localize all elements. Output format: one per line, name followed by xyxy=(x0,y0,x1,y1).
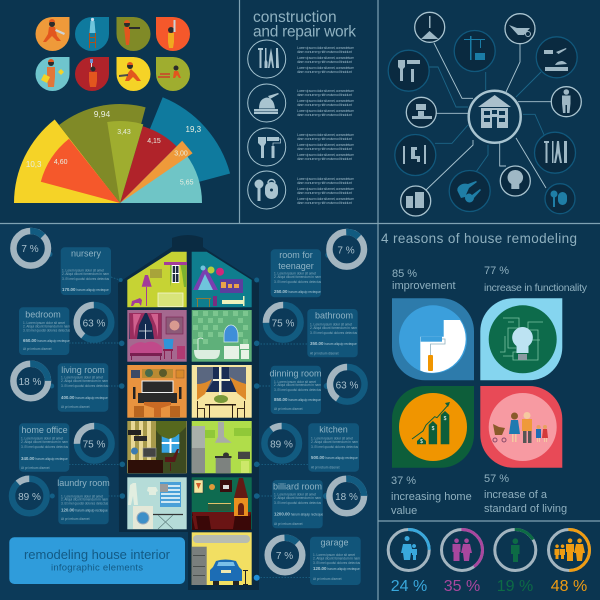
card: living room xyxy=(13,363,109,412)
heading: 4 reasons of house remodeling: 4 reasons of house remodeling xyxy=(381,231,577,246)
text: lorem lines 1: Lorem ipsum dolor sit amet, consectetuer xyxy=(297,65,355,70)
card: billiard room: At pri rebum disenet xyxy=(274,522,303,526)
banner: remodeling house interior: infographic elements xyxy=(51,562,143,574)
card: bathroom: bathroom xyxy=(315,310,353,320)
card: garage xyxy=(268,537,361,585)
stat: 48 percent: 48 % xyxy=(551,578,587,595)
panel: increasing home value: 37 % xyxy=(391,475,416,487)
card: dinning room xyxy=(269,360,371,414)
icon: trowel and bricks circle xyxy=(248,84,286,122)
card: kitchen: 1. Lorem ipsum dolor sit amet xyxy=(311,436,353,440)
icon: wheelbarrow xyxy=(505,14,535,44)
card: laundry room xyxy=(5,472,110,524)
card: laundry room: 89 % xyxy=(18,492,41,503)
icon: calculator and notes xyxy=(401,186,431,216)
stat: 48 percent xyxy=(548,530,590,595)
card: room for teenager xyxy=(271,232,364,297)
card: bedroom xyxy=(19,298,118,355)
banner: remodeling house interior: remodeling house interior xyxy=(24,547,171,562)
text: lorem lines 1: Lorem ipsum dolor sit amet, consectetuer xyxy=(297,45,355,50)
card: dinning room: dinning room xyxy=(269,368,322,378)
icon: wrenches and faucet xyxy=(395,134,436,176)
text: lorem lines 4: diam nonummy nibh euismod tincidunt xyxy=(297,180,353,185)
panel: standard of living: 57 % xyxy=(484,473,509,485)
icon: drill and key xyxy=(449,170,490,212)
icon: hook with load xyxy=(415,12,445,42)
text: lorem lines 2: Lorem ipsum dolor sit amet, consectetuer xyxy=(297,108,355,113)
stat: 35 percent: 35 % xyxy=(444,578,480,595)
card: garage: garage xyxy=(320,538,349,548)
card: living room: living room xyxy=(61,365,105,375)
card: kitchen: 2. Aliqui dicunt fomendum in nam xyxy=(311,440,358,444)
text: lorem lines 3: diam nonummy nibh euismod tincidunt xyxy=(297,146,353,151)
panel: increasing home value: $ xyxy=(444,416,447,422)
text: lorem lines 2: diam nonummy nibh euismod tincidunt xyxy=(297,102,353,107)
card: living room: 18 % xyxy=(19,377,42,388)
card: nursery xyxy=(13,231,111,295)
card: dinning room: 3. Et mel quodsi dolores detectus xyxy=(274,388,322,392)
card: room for teenager: room for xyxy=(279,250,313,260)
card: room for teenager: 2. Aliqui dicunt fomendum in nam xyxy=(274,275,321,279)
card: nursery: 170.00 harum aliquip recteque xyxy=(62,287,109,292)
card: room for teenager: teenager xyxy=(278,261,314,271)
card: laundry room: 3. Et mel quodsi dolores detectus xyxy=(61,502,109,506)
panel: increasing home value: increasing home xyxy=(391,491,472,503)
icon: brush and roller circle xyxy=(248,128,286,166)
room: garage xyxy=(192,532,252,585)
text: lorem lines 4: diam nonummy nibh euismod tincidunt xyxy=(297,190,353,195)
card: bedroom: bedroom xyxy=(25,310,61,320)
text: lorem lines 3: diam nonummy nibh euismod tincidunt xyxy=(297,136,353,141)
panel: improvement: 85 % xyxy=(392,268,417,280)
panel: improvement: improvement xyxy=(392,280,456,292)
chart: fan pie chart: 19,3 xyxy=(186,125,202,134)
text: lorem lines 2: diam nonummy nibh euismod tincidunt xyxy=(297,92,353,97)
stat: 24 percent xyxy=(388,530,429,595)
room: teenager xyxy=(192,252,252,307)
text: lorem lines 4 xyxy=(297,176,355,205)
text: lorem lines 4: Lorem ipsum dolor sit amet, consectetuer xyxy=(297,196,355,201)
text: lorem lines 3 xyxy=(297,132,355,161)
text: lorem lines 1: diam nonummy nibh euismod tincidunt xyxy=(297,49,353,54)
panel: improvement xyxy=(392,268,474,380)
card: home office: 1. Lorem ipsum dolor sit amet xyxy=(21,436,63,440)
text: lorem lines 4: Lorem ipsum dolor sit amet, consectetuer xyxy=(297,186,355,191)
card: laundry room: 120.00 harum aliquip recteque xyxy=(61,508,108,512)
card: bathroom: 75 % xyxy=(272,318,295,330)
room: bathroom xyxy=(192,310,252,362)
card: billiard room: 1. Lorem ipsum dolor sit amet xyxy=(274,492,316,496)
card: bedroom: 1. Lorem ipsum dolor sit amet xyxy=(23,321,65,325)
card: dinning room: 63 % xyxy=(336,380,359,392)
stat: 24 percent: 24 % xyxy=(391,578,427,595)
room: living room xyxy=(127,365,187,418)
card: laundry room: 1. Lorem ipsum dolor sit amet xyxy=(61,494,103,498)
card: dinning room: 2. Aliqui dicunt fomendum in nam xyxy=(274,383,321,387)
card: billiard room: 18 % xyxy=(335,492,358,503)
icon: keys and padlock xyxy=(545,184,575,214)
card: garage: 7 % xyxy=(276,551,293,562)
card: nursery: 3. Et mel quodsi dolores detectus xyxy=(62,277,110,281)
card: billiard room: 1200.00 harum aliquip recteque xyxy=(274,512,323,516)
text: lorem lines 1 xyxy=(297,45,355,74)
card: room for teenager: 7 % xyxy=(337,246,355,256)
card: billiard room xyxy=(272,479,364,528)
card: nursery: 1. Lorem ipsum dolor sit amet xyxy=(62,269,104,273)
room: dining room xyxy=(192,365,252,418)
card: home office: home office xyxy=(21,425,68,435)
chart: fan pie chart: 4,15 xyxy=(147,138,161,145)
icon: key and padlock circle xyxy=(248,171,286,209)
card: laundry room: laundry room xyxy=(57,478,110,488)
card: home office: 2. Aliqui dicunt fomendum in nam xyxy=(21,440,68,444)
room: kitchen xyxy=(192,421,252,473)
chart: fan pie chart: 5,65 xyxy=(180,180,194,186)
panel: increasing home value: value xyxy=(391,505,417,517)
text: lorem lines 1: Lorem ipsum dolor sit amet, consectetuer xyxy=(297,55,355,60)
text: lorem lines 2: diam nonummy nibh euismod tincidunt xyxy=(297,112,353,117)
card: kitchen xyxy=(258,419,359,472)
text: lorem lines 3: Lorem ipsum dolor sit amet, consectetuer xyxy=(297,142,355,147)
room: billiard xyxy=(192,477,252,530)
stat: 19 percent: 19 % xyxy=(497,578,533,595)
panel: construction tool list xyxy=(248,40,355,209)
card: bathroom: At pri rebum disenet xyxy=(310,352,339,356)
card: home office: 75 % xyxy=(83,440,106,450)
text: lorem lines 3: diam nonummy nibh euismod tincidunt xyxy=(297,156,353,161)
panel: room callouts right xyxy=(254,232,371,585)
icon: excavator and building xyxy=(536,37,577,78)
panel: room callouts left xyxy=(5,231,125,524)
card: garage: 3. Et mel quodsi dolores detectus xyxy=(313,561,361,565)
panel: increase in functionality: increase in functionality xyxy=(484,282,588,294)
card: bedroom: 2. Aliqui dicunt fomendum in nam xyxy=(23,325,70,329)
icon: central house xyxy=(469,91,521,143)
panel: standard of living: increase of a xyxy=(484,489,548,501)
card: dinning room: At pri rebum disenet xyxy=(274,407,303,411)
panel: increase in functionality: 77 % xyxy=(484,265,509,277)
room: laundry xyxy=(127,477,187,529)
icon: worker with wrench xyxy=(36,17,70,51)
panel: increasing home value: $ xyxy=(420,439,423,445)
icon: worker kneeling xyxy=(116,57,150,91)
card: kitchen: At pri rebum disenet xyxy=(311,466,340,470)
chart: fan pie chart: 3,00 xyxy=(174,150,188,158)
text: lorem lines 1: diam nonummy nibh euismod tincidunt xyxy=(297,59,353,64)
icon: light bulb xyxy=(500,166,530,196)
icon: hand tools xyxy=(534,132,576,173)
icon: worker on ladder xyxy=(75,17,109,51)
room: bedroom xyxy=(127,310,187,362)
card: dinning room: 1. Lorem ipsum dolor sit amet xyxy=(274,380,316,384)
panel: increase in functionality xyxy=(480,265,588,380)
room: nursery xyxy=(127,252,187,307)
icon: worker painting xyxy=(156,17,190,51)
heading: construction and repair work xyxy=(253,9,356,40)
card: laundry room: At pri rebum disenet xyxy=(61,517,90,521)
card: room for teenager: 1. Lorem ipsum dolor sit amet xyxy=(274,272,316,276)
card: kitchen: 3. Et mel quodsi dolores detectus xyxy=(311,445,359,449)
text: lorem lines 4: Lorem ipsum dolor sit amet, consectetuer xyxy=(297,176,355,181)
card: home office xyxy=(19,423,112,472)
icon: welder xyxy=(406,97,436,127)
card: bathroom: 2. Aliqui dicunt fomendum in nam xyxy=(310,326,357,330)
icon: worker with roller xyxy=(75,57,109,91)
panel: house cross-section xyxy=(118,235,259,590)
card: nursery: nursery xyxy=(71,248,102,258)
card: dinning room: 850.00 harum aliquip recteque xyxy=(274,397,321,402)
card: bedroom: 63 % xyxy=(83,318,106,330)
card: garage: At pri rebum disenet xyxy=(313,577,342,581)
heading: construction and repair work: and repair work xyxy=(253,24,356,40)
text: lorem lines 2: Lorem ipsum dolor sit amet, consectetuer xyxy=(297,98,355,103)
panel: trade network diagram xyxy=(388,12,581,216)
heading: construction and repair work: construction xyxy=(253,9,337,26)
card: room for teenager: 250.00 harum aliquip recteque xyxy=(274,289,321,294)
stat: 19 percent xyxy=(495,530,536,595)
icon: person xyxy=(551,87,581,117)
card: bathroom: 350.00 harum aliquip recteque xyxy=(310,341,357,346)
banner: remodeling house interior xyxy=(9,537,185,584)
panel: standard of living xyxy=(480,386,567,515)
card: bedroom: 3. Et mel quodsi dolores detectus xyxy=(23,329,71,333)
chart: fan pie chart: 3,43 xyxy=(117,129,131,136)
card: bathroom xyxy=(266,305,358,357)
card: home office: 3. Et mel quodsi dolores detectus xyxy=(21,445,69,449)
card: garage: 120.00 harum aliquip recteque xyxy=(313,566,360,571)
text: lorem lines 1: diam nonummy nibh euismod tincidunt xyxy=(297,69,353,74)
card: living room: 400.00 harum aliquip recteque xyxy=(61,395,108,400)
chart: fan pie chart: 4,60 xyxy=(54,159,68,166)
panel: worker icons xyxy=(36,17,190,91)
text: lorem lines 3: Lorem ipsum dolor sit amet, consectetuer xyxy=(297,132,355,137)
icon: worker with drill xyxy=(116,17,150,51)
card: home office: 340.00 harum aliquip recteque xyxy=(21,456,68,461)
text: lorem lines 3: Lorem ipsum dolor sit amet, consectetuer xyxy=(297,152,355,157)
card: living room: 2. Aliqui dicunt fomendum in nam xyxy=(61,379,108,383)
card: bedroom: At pri rebum disenet xyxy=(23,347,52,351)
icon: worker laying bricks xyxy=(156,57,190,91)
card: kitchen: 89 % xyxy=(270,440,293,450)
card: garage: 2. Aliqui dicunt fomendum in nam xyxy=(313,556,360,560)
chart: fan pie chart: 10,3 xyxy=(26,160,42,169)
panel: increasing home value: $ xyxy=(432,426,435,432)
icon: brush and roller xyxy=(388,50,429,91)
text: lorem lines 4: diam nonummy nibh euismod tincidunt xyxy=(297,200,353,205)
card: living room: 1. Lorem ipsum dolor sit amet xyxy=(61,375,103,379)
house silhouette xyxy=(118,235,259,590)
stat: 35 percent xyxy=(442,530,482,595)
card: living room: At pri rebum disenet xyxy=(61,405,90,409)
panel: standard of living: standard of living xyxy=(484,503,567,515)
card: garage: 1. Lorem ipsum dolor sit amet xyxy=(313,553,355,557)
card: kitchen: 500.00 harum aliquip recteque xyxy=(311,455,358,460)
text: lorem lines 2 xyxy=(297,88,355,117)
card: billiard room: billiard room xyxy=(273,482,322,492)
icon: worker with tile xyxy=(36,57,70,91)
icon: tower crane xyxy=(454,30,495,72)
card: living room: 3. Et mel quodsi dolores detectus xyxy=(61,384,109,388)
card: nursery: 2. Aliqui dicunt fomendum in nam xyxy=(62,272,109,276)
chart: fan pie chart: 9,94 xyxy=(94,109,111,119)
icon: hand tools circle xyxy=(248,40,286,78)
room: home office xyxy=(127,421,187,473)
card: home office: At pri rebum disenet xyxy=(21,466,50,470)
card: room for teenager: 3. Et mel quodsi dolores detectus xyxy=(274,280,322,284)
text: lorem lines 2: Lorem ipsum dolor sit amet, consectetuer xyxy=(297,88,355,93)
card: bedroom: 650.00 harum aliquip recteque xyxy=(23,338,70,343)
card: laundry room: 2. Aliqui dicunt fomendum in nam xyxy=(61,498,108,502)
card: bathroom: 3. Et mel quodsi dolores detectus xyxy=(310,331,358,335)
card: billiard room: 3. Et mel quodsi dolores detectus xyxy=(274,501,322,505)
chart: fan pie chart xyxy=(14,97,230,203)
panel: increasing home value xyxy=(391,386,474,517)
card: kitchen: kitchen xyxy=(319,424,348,434)
panel: family statistics xyxy=(388,530,590,595)
card: billiard room: 2. Aliqui dicunt fomendum in nam xyxy=(274,496,321,500)
card: nursery: 7 % xyxy=(21,244,39,255)
card: bathroom: 1. Lorem ipsum dolor sit amet xyxy=(310,322,352,326)
